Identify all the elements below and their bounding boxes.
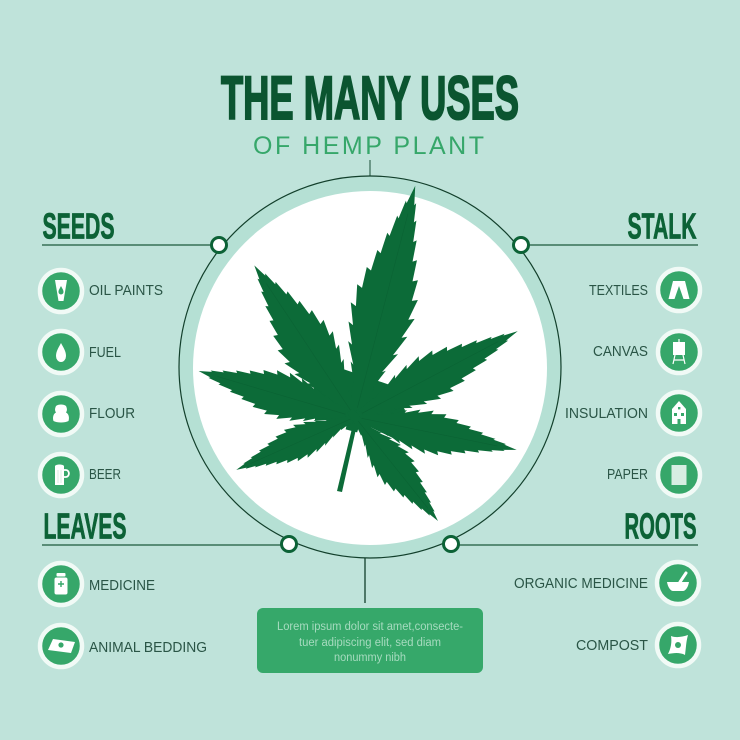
icon: flour: [40, 393, 82, 435]
label: textiles: TEXTILES: [589, 283, 648, 299]
label: flour: FLOUR: [89, 406, 135, 422]
label: beer: BEER: [89, 467, 121, 483]
label: paper: PAPER: [607, 467, 648, 483]
icon: insulation: [658, 392, 700, 434]
label: organic medicine: ORGANIC MEDICINE: [514, 576, 648, 592]
callout: text box: tuer adipiscing elit, sed diam: [299, 637, 441, 649]
label: insulation: INSULATION: [565, 406, 648, 422]
icon: animal bedding: [40, 625, 82, 667]
icon: textiles: [658, 269, 700, 311]
heading: leaves: LEAVES: [44, 506, 126, 547]
outer ring: [179, 176, 561, 558]
heading: seeds: SEEDS: [42, 206, 114, 247]
icon: organic medicine: [657, 562, 699, 604]
callout: text box: [257, 608, 483, 673]
icon: canvas: [658, 331, 700, 373]
label: oil paints: OIL PAINTS: [89, 283, 163, 299]
label: fuel: FUEL: [89, 345, 121, 361]
icon: beer: [40, 454, 82, 496]
icon: oil paints: [40, 270, 82, 312]
connector nodes: [212, 238, 528, 552]
icon: medicine: [40, 563, 82, 605]
icon: fuel: [40, 331, 82, 373]
icon: hemp leaf: [192, 177, 529, 533]
icon: paper: [658, 454, 700, 496]
icon: compost: [657, 624, 699, 666]
title: THE MANY USES: [221, 64, 519, 132]
central circle with leaf: [179, 176, 561, 558]
callout: text box: Lorem ipsum dolor sit amet,consecte-: [277, 621, 463, 633]
label: canvas: CANVAS: [593, 344, 648, 360]
label: compost: COMPOST: [576, 638, 648, 654]
label: medicine: MEDICINE: [89, 578, 155, 594]
label: animal bedding: ANIMAL BEDDING: [89, 640, 207, 656]
subtitle: OF HEMP PLANT: [253, 132, 484, 160]
section rules: [42, 245, 698, 545]
connector: title to circle: [369, 160, 371, 176]
connector: circle to text box: [364, 558, 366, 603]
callout: text box: nonummy nibh: [334, 652, 406, 664]
leaf stem: [337, 420, 358, 492]
white disc: [193, 191, 547, 545]
leaf body: [315, 369, 405, 438]
